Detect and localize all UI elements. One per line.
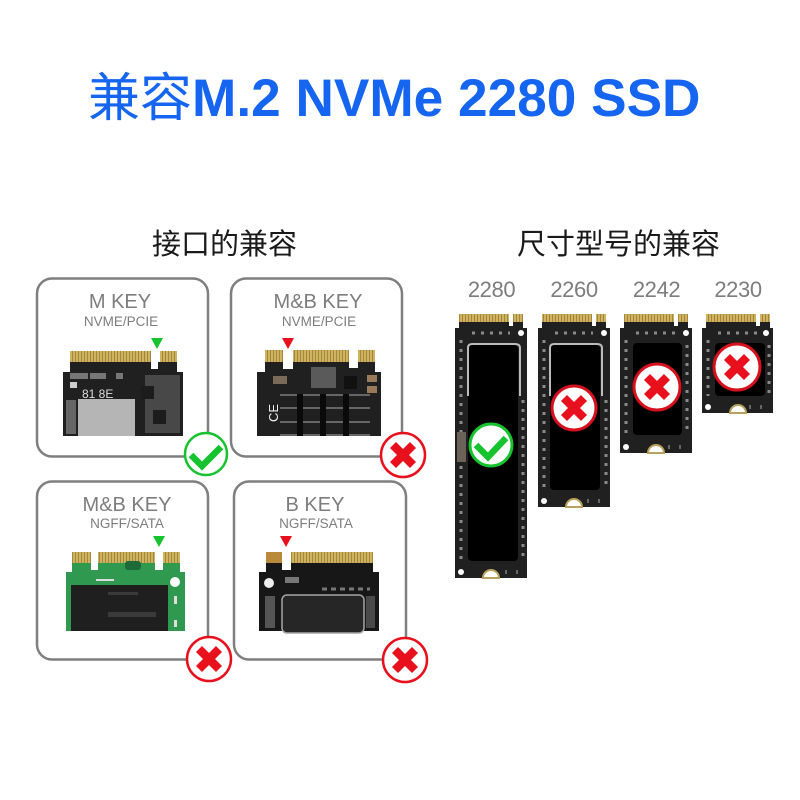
label: 2242: 2242	[633, 277, 680, 302]
badge: 2230 incompatible	[714, 344, 760, 390]
heading: interface compatibility: 接口的兼容	[152, 228, 297, 261]
label: M KEY: M KEY	[89, 291, 151, 313]
label: 2280: 2280	[468, 277, 515, 302]
photo: M&B key heatsink module: CE	[266, 404, 281, 422]
badge: M&B NVME incompatible	[381, 433, 425, 477]
label: NGFF/SATA: NGFF/SATA	[279, 516, 353, 531]
photo: B key module	[259, 552, 379, 633]
label: M&B KEY: M&B KEY	[274, 291, 362, 313]
badge: 2280 compatible	[470, 424, 512, 466]
marker: green notch arrow	[151, 338, 163, 349]
label: NVME/PCIE: NVME/PCIE	[282, 314, 356, 329]
photo: M key module: 81 8E	[82, 387, 113, 401]
badge: M KEY compatible	[185, 433, 227, 475]
SSD: 2230	[702, 314, 773, 413]
panel: M&B KEY NGFF/SATA	[37, 482, 208, 660]
photo: M&B key heatsink module	[257, 350, 381, 436]
SSD: 2280	[455, 314, 527, 578]
marker: red notch arrow	[280, 536, 292, 547]
badge: 2260 incompatible	[552, 386, 596, 430]
photo: M&B SATA module	[66, 552, 185, 631]
heading: size compatibility: 尺寸型号的兼容	[517, 228, 720, 261]
SSD: 2260	[538, 314, 610, 507]
panel: B KEY NGFF/SATA	[234, 482, 406, 660]
badge: B KEY incompatible	[383, 638, 427, 682]
label: 2260: 2260	[550, 277, 598, 302]
panel: M KEY NVME/PCIE	[37, 278, 208, 456]
marker: green notch arrow	[153, 536, 165, 547]
marker: red notch arrow	[282, 338, 294, 349]
panel: M&B KEY NVME/PCIE	[231, 278, 402, 456]
label: B KEY: B KEY	[286, 494, 344, 516]
title: 兼容M.2 NVMe 2280 SSD	[88, 69, 700, 128]
SSD: 2242	[620, 314, 692, 453]
label: 2230: 2230	[714, 277, 762, 302]
photo: M key module	[63, 351, 183, 436]
label: M&B KEY: M&B KEY	[83, 494, 171, 516]
badge: 2242 incompatible	[634, 364, 680, 410]
badge: M&B SATA incompatible	[187, 637, 231, 681]
label: NGFF/SATA: NGFF/SATA	[90, 516, 164, 531]
label: NVME/PCIE: NVME/PCIE	[84, 314, 158, 329]
